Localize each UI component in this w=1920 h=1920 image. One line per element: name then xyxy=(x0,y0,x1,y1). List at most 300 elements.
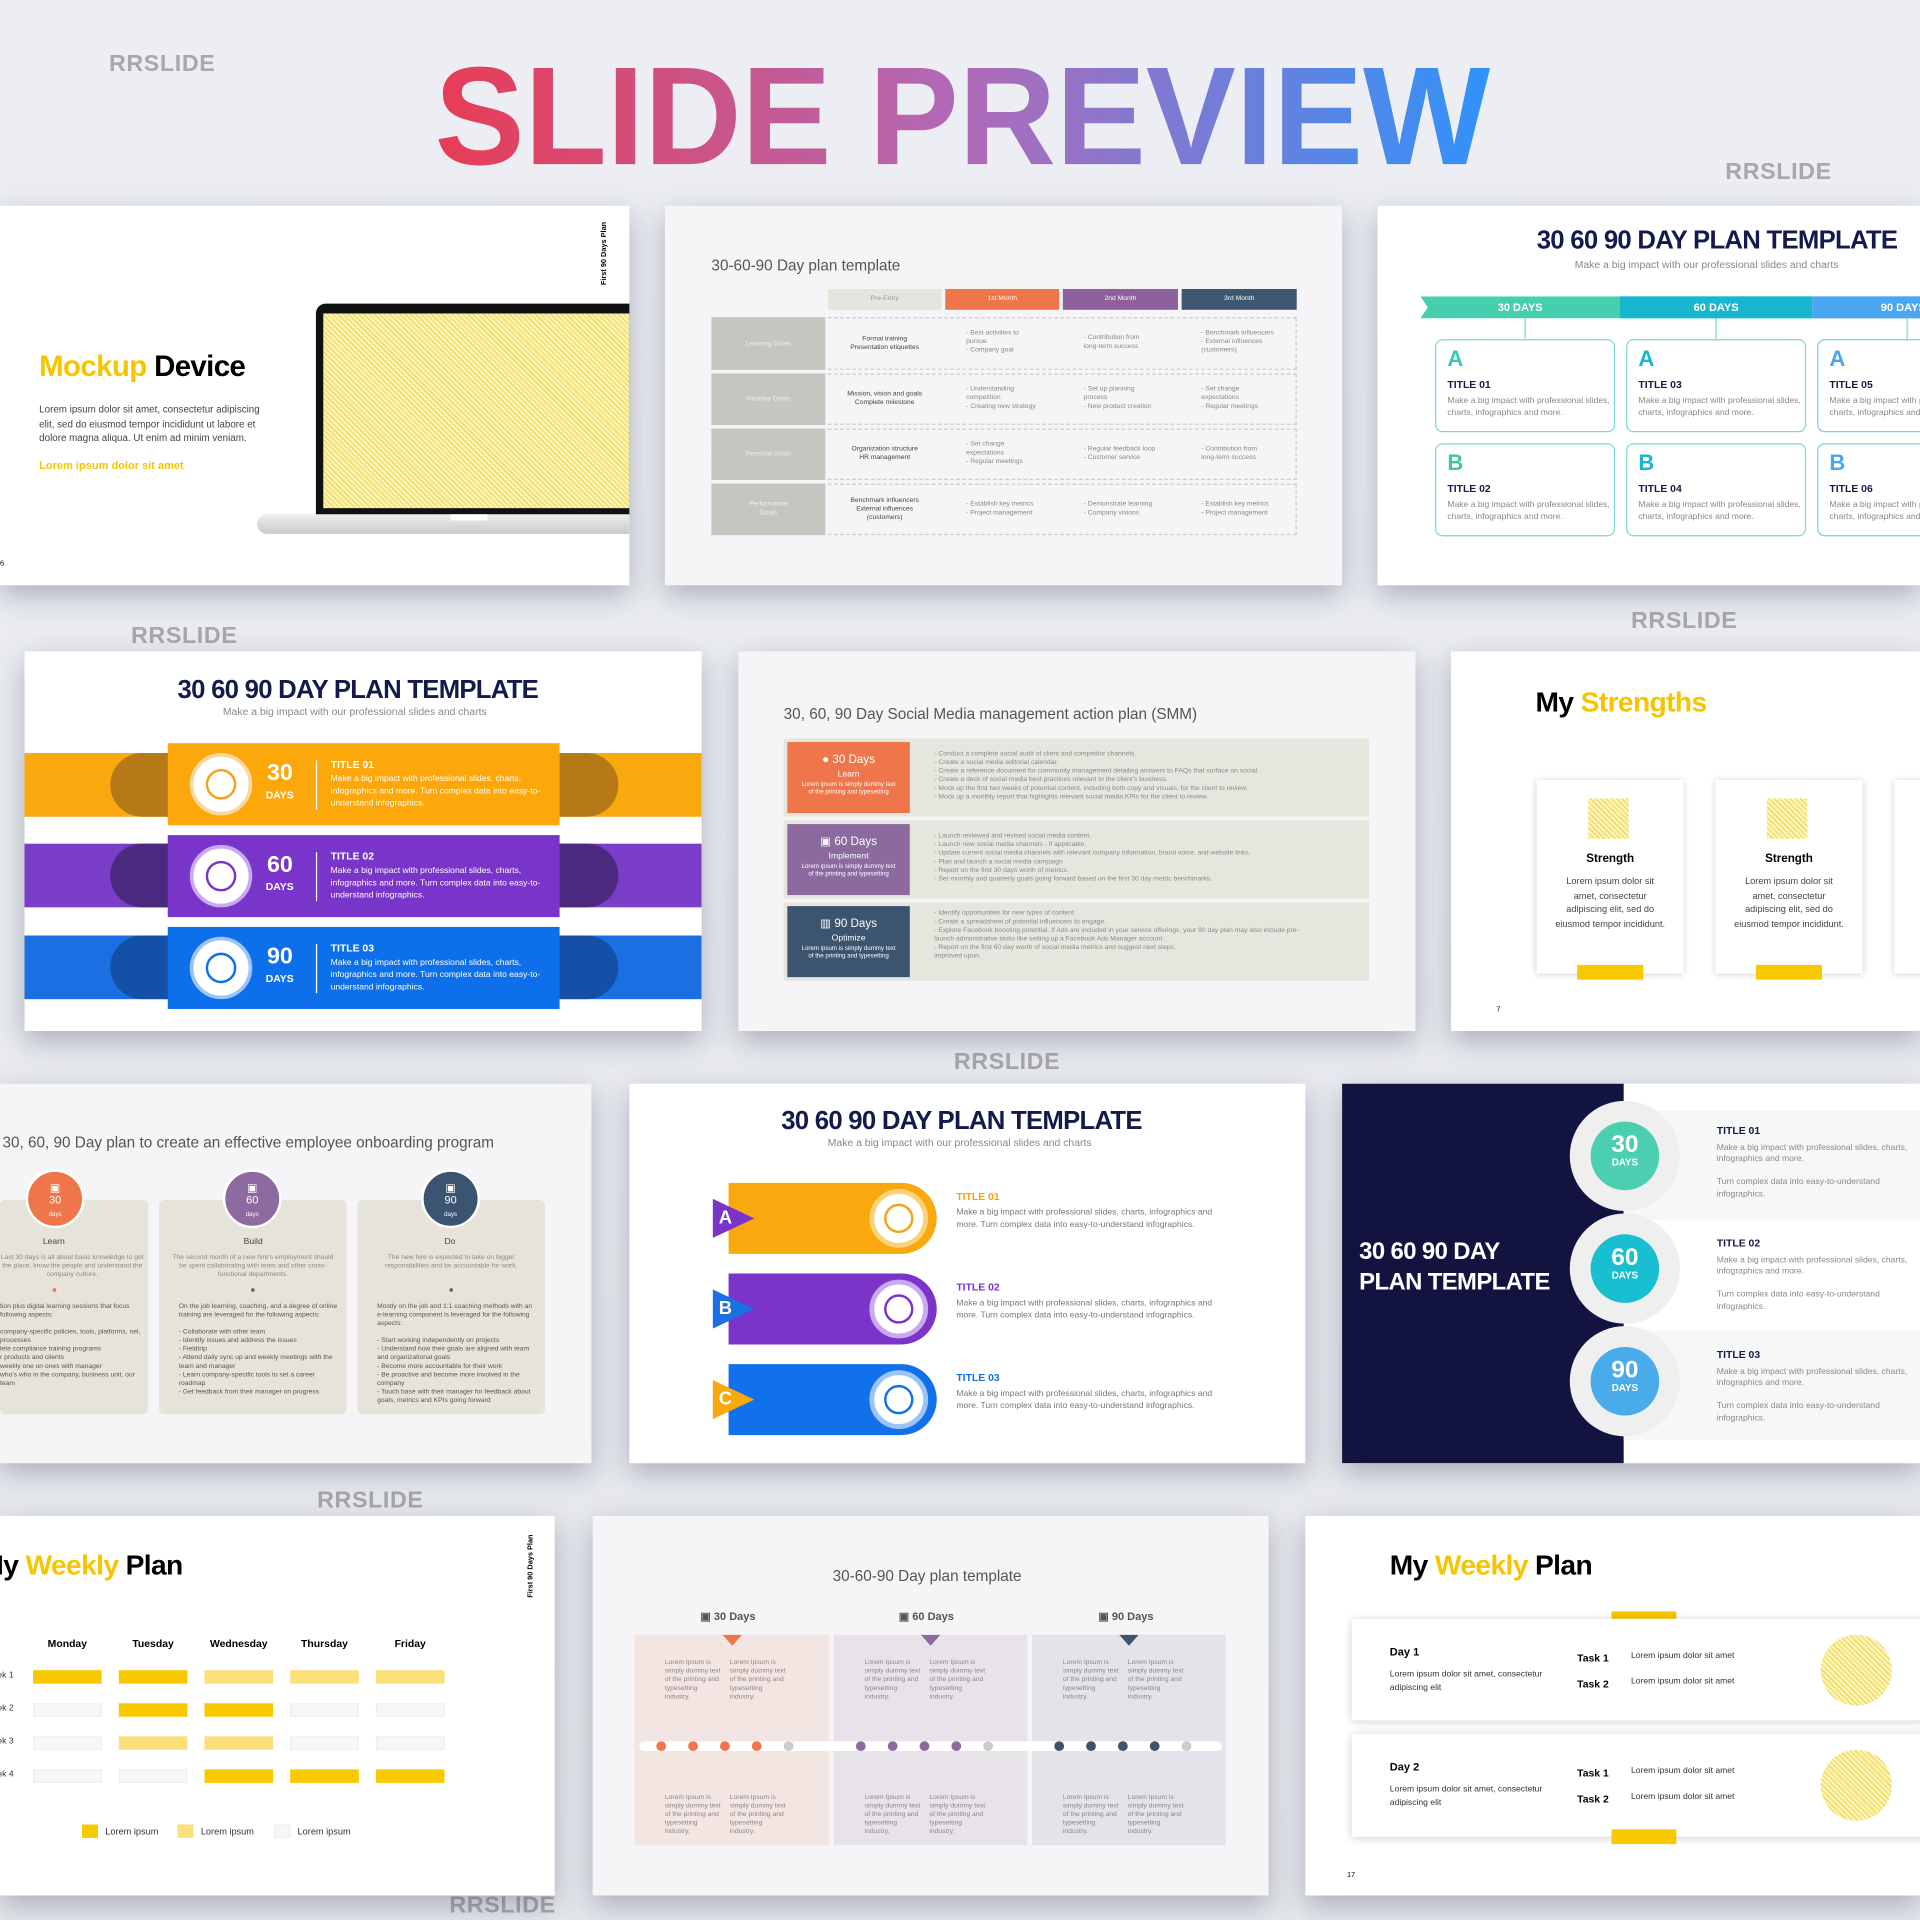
column 30 days: of the printing and xyxy=(730,1676,784,1684)
circle 90: 90 xyxy=(1611,1357,1639,1384)
timeline bar xyxy=(1420,296,1920,318)
band 30 days: TITLE 01 xyxy=(331,758,374,770)
band 30 days: 30 xyxy=(267,760,293,786)
columns: Build xyxy=(244,1238,263,1247)
columns: The second month of a new hire's employment should be spent collaborating with team and other cross-functional departments. xyxy=(172,1254,333,1278)
table rows: pursue xyxy=(966,338,987,345)
column 90 days: Lorem Ipsum is xyxy=(1128,1794,1174,1801)
table rows: Initiative Goals xyxy=(746,396,790,403)
table rows: (customers) xyxy=(867,514,902,522)
row 30 days: - Mock up a monthly report that highlights relevant social media KPIs for the client to review. xyxy=(934,793,1208,801)
row 90 days: launch administrative tasks like setting up a Facebook Ads Manager account. xyxy=(934,936,1164,943)
navy panel xyxy=(1342,1084,1624,1463)
heading: 30-60-90 Day plan template xyxy=(711,257,900,274)
day 2 card: Task 2 xyxy=(1577,1793,1609,1805)
table rows: Organization structure xyxy=(852,446,918,453)
column 30 days: of the printing and xyxy=(665,1811,719,1818)
row 30 days xyxy=(784,738,1369,817)
row 90 days xyxy=(784,902,1369,981)
columns: lete compliance training programs xyxy=(0,1346,101,1353)
columns: - Fieldtrip xyxy=(179,1346,207,1353)
cards grid: TITLE 01 xyxy=(1447,378,1491,391)
circle 60: 60 xyxy=(1611,1244,1639,1271)
cards grid: Make a big impact with professional slides, charts, infographics and more. xyxy=(1638,397,1801,418)
row 90 days: Optimize xyxy=(832,934,865,943)
table header xyxy=(828,289,1297,310)
day headers: Tuesday xyxy=(132,1637,174,1649)
slide H: A B C arrows xyxy=(629,1084,1305,1463)
table rows: Benchmark influencers xyxy=(850,497,919,504)
row 90 days: Lorem ipsum is simply dummy text xyxy=(802,945,896,953)
band 60 days: 60 xyxy=(267,852,293,878)
columns: - Collaborate with other team xyxy=(179,1329,265,1336)
strength cards xyxy=(1533,778,1920,980)
strength cards: Strength xyxy=(1765,852,1813,866)
watermark: RRSLIDE middle: RRSLIDE xyxy=(954,1049,1060,1075)
row 60 days: ▣ 60 Days xyxy=(820,835,877,849)
table rows: - Set change xyxy=(966,441,1004,448)
table rows: Presentation etiquettes xyxy=(850,344,919,351)
day 2 card: Task 1 xyxy=(1577,1767,1609,1779)
table rows: Formal training xyxy=(862,336,907,343)
columns: - Learn company-specific tools to set a career roadmap xyxy=(179,1371,315,1387)
column 30 days xyxy=(634,1635,829,1845)
column 60 days: simply dummy text xyxy=(864,1802,920,1810)
day 1 card: Lorem ipsum dolor sit amet xyxy=(1631,1678,1734,1686)
column 90 days: Lorem Ipsum is xyxy=(1128,1659,1174,1667)
link text: Lorem ipsum dolor sit amet xyxy=(39,459,184,471)
columns: - Be proactive and become more involved in the company xyxy=(377,1371,520,1387)
slide F: My Strengths xyxy=(1451,651,1920,1031)
columns: - Touch base with their manager for feedback about goals, metrics and KPIs going forward xyxy=(377,1389,531,1404)
subtitle: Make a big impact with our professional slides and charts xyxy=(828,1136,1092,1149)
slide I: dark navy template: TITLE 02 xyxy=(1717,1237,1760,1249)
day 2 card: Lorem ipsum dolor sit amet xyxy=(1631,1793,1734,1801)
row 60 days xyxy=(784,820,1369,899)
day 2 card: Lorem ipsum dolor sit amet xyxy=(1631,1767,1734,1776)
slide D: bands 30/60/90 xyxy=(24,651,702,1031)
day 1 card: Lorem ipsum dolor sit amet xyxy=(1631,1652,1734,1660)
strength cards: Lorem ipsum dolor sit amet, consectetur adipiscing elit, sed do eiusmod tempor incididunt. xyxy=(1555,876,1665,929)
row 30 days: - Create a deck of social media best practices relevant to the client's business. xyxy=(934,776,1168,784)
table header: Pre-Entry xyxy=(870,295,899,302)
row 60 days: Lorem ipsum is simply dummy text xyxy=(802,863,896,871)
column 90 days: industry. xyxy=(1128,1693,1153,1701)
column 60 days: Lorem Ipsum is xyxy=(864,1659,911,1667)
column 30 days: typesetting xyxy=(665,1685,697,1692)
column 90 days: industry. xyxy=(1128,1828,1153,1836)
table rows: expectations xyxy=(966,449,1004,457)
band 90 days: DAYS xyxy=(266,972,294,984)
columns: days xyxy=(246,1211,259,1218)
row texts xyxy=(1716,1124,1907,1198)
column 90 days: typesetting xyxy=(1128,1820,1160,1827)
column 90 days: Lorem Ipsum is xyxy=(1063,1794,1109,1801)
watermark: RRSLIDE row2 right: RRSLIDE xyxy=(1631,609,1737,634)
slide I: dark navy template: Turn complex data into easy-to-understand infographics. xyxy=(1717,1291,1880,1311)
circle 90: DAYS xyxy=(1612,1382,1638,1393)
columns: - Attend daily sync up and weekly meetings with the team and manager xyxy=(179,1354,333,1370)
row 90 days: improved upon. xyxy=(934,953,981,960)
cards grid: A xyxy=(1638,347,1654,371)
table rows: competition xyxy=(966,394,1001,402)
columns: ▣ xyxy=(50,1182,60,1194)
step A: Make a big impact with professional slides, charts, infographics and more. Turn complex data into easy-to-understand infographics. xyxy=(956,1209,1212,1229)
column 90 days: typesetting xyxy=(1063,1685,1095,1692)
table rows: - Company visions xyxy=(1084,509,1139,517)
step A: A xyxy=(719,1207,732,1228)
column 90 days xyxy=(1032,1635,1226,1845)
column 90 days: of the printing and xyxy=(1128,1811,1182,1818)
table rows: Performance xyxy=(749,501,788,508)
row texts: Turn complex data into easy-to-understand infographics. xyxy=(1717,1178,1880,1198)
columns: - Understand how their goals are aligned with team and organizational goals xyxy=(377,1346,529,1362)
table rows: - Regular meetings xyxy=(966,458,1023,465)
row 60 days: of the printing and typesetting xyxy=(808,871,889,878)
circle 90 xyxy=(1570,1326,1680,1436)
timeline xyxy=(639,1741,1222,1751)
slide J: Weekly Plan grid xyxy=(0,1516,555,1896)
band 30 days xyxy=(24,743,702,826)
row 90 days: - Create a spreadsheet of potential influencers to engage. xyxy=(934,918,1106,926)
row 60 days: - Launch reviewed and revised social media content. xyxy=(934,833,1091,840)
column 60 days: of the printing and xyxy=(864,1676,918,1684)
column 30 days: simply dummy text xyxy=(730,1668,786,1675)
band 90 days: Make a big impact with professional slides, charts, infographics and more. Turn complex data into easy-to-understand infographics. xyxy=(331,959,540,992)
columns: Learn xyxy=(43,1238,65,1247)
step C: Make a big impact with professional slides, charts, infographics and more. Turn complex data into easy-to-understand infographics. xyxy=(956,1390,1212,1411)
column 30 days: simply dummy text xyxy=(665,1668,721,1675)
column 30 days: simply dummy text xyxy=(730,1802,786,1810)
column 60 days: industry. xyxy=(929,1693,954,1701)
table rows: - Project management xyxy=(966,509,1032,517)
table rows: - Regular feedback loop xyxy=(1084,446,1155,453)
column 30 days: Lorem Ipsum is xyxy=(665,1659,711,1667)
row 90 days: ▥ 90 Days xyxy=(820,917,877,931)
column 60 days: of the printing and xyxy=(929,1811,983,1818)
cards grid xyxy=(1435,339,1920,536)
table rows: - Demonstrate learning xyxy=(1084,501,1152,508)
columns: - Become more accountable for their work xyxy=(377,1363,502,1370)
step B xyxy=(712,1274,1212,1344)
heading: My Strengths xyxy=(1536,686,1707,718)
row 60 days: - Update current social media channels with relevant company information, brand voice, and website links. xyxy=(934,850,1251,857)
columns: Do xyxy=(444,1238,455,1247)
table rows: - Regular meetings xyxy=(1201,403,1258,410)
table rows: expectations xyxy=(1201,394,1239,402)
columns: company-specific policies, tools, platforms, nel, processes xyxy=(0,1329,140,1344)
row texts: Make a big impact with professional slides, charts, infographics and more. xyxy=(1717,1143,1907,1163)
step B: TITLE 02 xyxy=(956,1281,1000,1293)
circle 60 xyxy=(1570,1213,1680,1324)
slide B: 30-60-90 table xyxy=(665,206,1342,585)
column 60 days: simply dummy text xyxy=(864,1668,920,1675)
subtitle: Make a big impact with our professional slides and charts xyxy=(1575,258,1839,271)
slide I: dark navy template: Turn complex data into easy-to-understand infographics. xyxy=(1717,1402,1880,1422)
column 30 days: Lorem Ipsum is xyxy=(730,1794,776,1801)
columns: tion plus digital learning sessions that focus following aspects: xyxy=(0,1303,130,1319)
column 60 days: simply dummy text xyxy=(929,1802,985,1810)
table header: 3rd Month xyxy=(1224,295,1254,302)
row 60 days: - Plan and launch a social media campaign xyxy=(934,858,1063,866)
column 30 days: Lorem Ipsum is xyxy=(730,1659,776,1667)
column 30 days: industry. xyxy=(665,1693,690,1701)
page number: 6 xyxy=(0,561,4,568)
row 30 days: ● 30 Days xyxy=(822,753,875,767)
columns: Last 30 days is all about basic knowledge to get the place, know the people and understand the company culture. xyxy=(1,1254,144,1278)
watermark: RRSLIDE top left: RRSLIDE xyxy=(109,51,215,77)
column 60 days: Lorem Ipsum is xyxy=(929,1794,975,1801)
column 30 days: of the printing and xyxy=(665,1676,719,1684)
cards grid: B xyxy=(1447,451,1463,475)
circle 30: DAYS xyxy=(1612,1157,1638,1168)
column 90 days: simply dummy text xyxy=(1128,1802,1184,1810)
heading: 30-60-90 Day plan template xyxy=(833,1567,1022,1584)
columns: On the job learning, coaching, and a degree of online training are leveraged for the following aspects: xyxy=(179,1303,337,1319)
page number: 17 xyxy=(1347,1872,1355,1880)
table rows: - New product creation xyxy=(1084,403,1151,410)
step C: TITLE 03 xyxy=(956,1371,1000,1384)
slide I: dark navy template: Make a big impact with professional slides, charts, infographics and more. xyxy=(1717,1367,1907,1387)
circle 30: 30 xyxy=(1611,1131,1639,1158)
column 90 days: of the printing and xyxy=(1128,1676,1182,1684)
band 90 days: 90 xyxy=(267,944,293,970)
legend: Lorem ipsum xyxy=(105,1826,158,1837)
column 60 days: typesetting xyxy=(864,1685,897,1692)
watermark: RRSLIDE bottom: RRSLIDE xyxy=(449,1893,556,1919)
columns: weekly one on ones with manager xyxy=(0,1363,102,1370)
day headers: Monday xyxy=(48,1637,87,1649)
column 30 days: typesetting xyxy=(665,1820,697,1827)
cards grid: B xyxy=(1638,451,1654,475)
day headers: Wednesday xyxy=(210,1637,268,1649)
row 90 days: of the printing and typesetting xyxy=(808,953,889,960)
table rows: - Understanding xyxy=(966,386,1014,393)
columns: 90 xyxy=(444,1194,457,1206)
day 1 card: Lorem ipsum dolor sit amet, consectetur adipiscing elit xyxy=(1390,1670,1542,1692)
column 60 days: Lorem Ipsum is xyxy=(864,1794,911,1801)
row texts: TITLE 01 xyxy=(1717,1124,1760,1136)
table rows: Personal Goals xyxy=(745,451,791,458)
slide I: dark navy template: TITLE 03 xyxy=(1717,1348,1760,1360)
columns xyxy=(0,1170,545,1414)
day 1 card xyxy=(1348,1611,1920,1726)
heading: 30, 60, 90 Day plan to create an effective employee onboarding program xyxy=(2,1134,494,1151)
row 30 days: Lorem ipsum is simply dummy text xyxy=(802,781,896,789)
column 60 days: of the printing and xyxy=(929,1676,983,1684)
vertical label: First 90 Days Plan xyxy=(601,222,608,285)
table rows: - Establish key metrics xyxy=(1201,501,1269,508)
row 30 days: - Create a social media editorial calendar. xyxy=(934,759,1058,767)
table rows: Goals xyxy=(760,509,777,517)
row 90 days: - Explore Facebook boosting potential. If Ads are included in your service offerings, your 90 day plan may also include pre- xyxy=(934,927,1299,934)
slide I: dark navy template: Make a big impact with professional slides, charts, infographics and more. xyxy=(1717,1256,1907,1276)
day 2 card: Lorem ipsum dolor sit amet, consectetur adipiscing elit xyxy=(1390,1785,1542,1807)
watermark: RRSLIDE top right: RRSLIDE xyxy=(1725,159,1832,185)
band 60 days: DAYS xyxy=(266,880,294,893)
column 90 days: of the printing and xyxy=(1063,1676,1117,1684)
table rows: External influences xyxy=(856,506,913,513)
text block: Lorem ipsum dolor sit amet, consectetur adipiscing elit, sed do eiusmod tempor incididunt ut labore et dolore magna aliqua. Ut enim ad minim veniam. xyxy=(39,404,260,443)
day headers: Friday xyxy=(395,1637,426,1649)
row 60 days: - Launch new social media channels - if applicable. xyxy=(934,841,1086,849)
strength cards: Strength xyxy=(1586,852,1634,866)
table rows: HR management xyxy=(859,454,910,462)
column 90 days: Lorem Ipsum is xyxy=(1063,1659,1109,1667)
columns: ▣ xyxy=(247,1182,257,1194)
table header: 2nd Month xyxy=(1104,295,1136,302)
timeline bar: 30 DAYS xyxy=(1498,301,1543,313)
cards grid: TITLE 05 xyxy=(1829,378,1873,391)
column 30 days: typesetting xyxy=(730,1820,762,1827)
day 1 card: Task 2 xyxy=(1577,1678,1609,1690)
table rows: - Creating new strategy xyxy=(966,403,1036,410)
slide G: onboarding program xyxy=(0,1084,591,1463)
columns: Mostly on the job and 1:1 coaching methods with an e-learning component is leveraged for the following aspects: xyxy=(377,1303,532,1327)
day 2 card: Day 2 xyxy=(1390,1761,1419,1773)
column 60 days: industry. xyxy=(864,1693,889,1701)
row 30 days: of the printing and typesetting xyxy=(808,789,889,796)
column 60 days: typesetting xyxy=(929,1820,962,1827)
column headers: ▣ 30 Days xyxy=(700,1610,756,1622)
column 90 days: typesetting xyxy=(1128,1685,1160,1692)
step C xyxy=(712,1364,1212,1436)
table rows: - Company goal xyxy=(966,347,1014,354)
column 30 days: typesetting xyxy=(730,1685,762,1692)
row 30 days: Learn xyxy=(838,770,860,779)
row 60 days: - Report on the first 30 days worth of metrics. xyxy=(934,867,1069,874)
day 2 card xyxy=(1348,1731,1920,1844)
cards grid: Make a big impact with professional slides, charts, infographics and more. xyxy=(1447,501,1610,522)
band 60 days: Make a big impact with professional slides, charts, infographics and more. Turn complex data into easy-to-understand infographics. xyxy=(331,867,540,900)
subtitle: Make a big impact with our professional slides and charts xyxy=(223,705,487,718)
column 60 days xyxy=(834,1635,1027,1845)
column 60 days: simply dummy text xyxy=(929,1668,985,1675)
columns: The new hire is expected to take on bigger responsibilities and be accountable for work. xyxy=(385,1254,517,1270)
table header: 1st Month xyxy=(987,295,1017,302)
step A xyxy=(712,1182,1212,1254)
band 90 days: TITLE 03 xyxy=(331,942,374,954)
heading xyxy=(1359,1238,1550,1296)
cards grid: TITLE 02 xyxy=(1447,482,1491,495)
week grid xyxy=(0,1670,444,1783)
legend xyxy=(82,1824,351,1838)
cards grid: A xyxy=(1447,347,1463,371)
table rows: long-term success xyxy=(1201,454,1256,462)
cards grid: Make a big impact with professional slides, charts, infographics and more. xyxy=(1638,501,1801,522)
row 30 days: - Conduct a complete social audit of client and competitor channels. xyxy=(934,751,1136,758)
column 30 days: of the printing and xyxy=(730,1811,784,1818)
column 90 days: typesetting xyxy=(1063,1820,1095,1827)
column 30 days: industry. xyxy=(730,1828,755,1836)
vertical label: First 90 Days Plan xyxy=(528,1534,535,1598)
column 60 days: industry. xyxy=(929,1828,954,1836)
slide A: Mockup Device xyxy=(0,206,629,585)
heading: 30, 60, 90 Day Social Media management action plan (SMM) xyxy=(784,705,1197,722)
band 60 days xyxy=(24,835,702,918)
slide I: dark navy template xyxy=(1342,1084,1920,1463)
column 60 days: industry. xyxy=(864,1828,889,1836)
cards grid: TITLE 04 xyxy=(1638,482,1682,495)
column 30 days: industry. xyxy=(730,1693,755,1701)
legend: Lorem ipsum xyxy=(201,1826,254,1837)
watermark: RRSLIDE row4: RRSLIDE xyxy=(317,1488,424,1513)
column 90 days: simply dummy text xyxy=(1063,1802,1119,1810)
band 60 days: TITLE 02 xyxy=(331,850,374,862)
day 1 card: Day 1 xyxy=(1390,1646,1419,1658)
column 90 days: simply dummy text xyxy=(1063,1668,1119,1675)
heading: Mockup Device: Mockup Device xyxy=(39,350,245,383)
columns: days xyxy=(444,1211,457,1218)
columns: 30 xyxy=(49,1194,61,1206)
columns: who's who in the company, business unit, our team xyxy=(0,1371,135,1387)
heading: 30 60 90 DAY PLAN TEMPLATE xyxy=(178,676,538,704)
column 30 days: simply dummy text xyxy=(665,1802,721,1810)
circle 30 xyxy=(1570,1101,1680,1211)
column 90 days: industry. xyxy=(1063,1828,1088,1836)
heading: 30 60 90 DAY PLAN TEMPLATE xyxy=(781,1107,1142,1135)
column 60 days: of the printing and xyxy=(864,1811,918,1818)
day headers xyxy=(48,1637,426,1649)
day 1 card: Task 1 xyxy=(1577,1652,1609,1664)
row backgrounds xyxy=(1624,1111,1920,1220)
cards grid: TITLE 03 xyxy=(1638,378,1682,391)
table rows: Mission, vision and goals xyxy=(847,391,922,398)
row 90 days: - Report on the first 60 day worth of social media metrics and suggest next steps. xyxy=(934,944,1176,951)
table rows: - Project management xyxy=(1201,509,1267,517)
timeline bar: 60 DAYS xyxy=(1694,301,1739,313)
column 60 days: Lorem Ipsum is xyxy=(929,1659,975,1667)
step B: B xyxy=(719,1298,732,1319)
cards grid: TITLE 06 xyxy=(1829,482,1873,495)
column 60 days: typesetting xyxy=(864,1820,897,1827)
table rows: Learning Goals xyxy=(746,340,791,348)
columns: ▣ xyxy=(445,1182,456,1194)
heading: 30 60 90 DAY PLAN TEMPLATE xyxy=(1537,227,1897,255)
slide C: 30 60 90 cards xyxy=(1378,206,1920,585)
columns: - Get feedback from their manager on progress xyxy=(179,1389,319,1396)
column 30 days: Lorem Ipsum is xyxy=(665,1794,711,1801)
watermark: RRSLIDE row2 left: RRSLIDE xyxy=(131,623,237,649)
column 60 days: typesetting xyxy=(929,1685,962,1692)
table rows: - Contribution from xyxy=(1201,446,1257,453)
page number: 7 xyxy=(1496,1007,1500,1014)
heading: 30 60 90 DAY xyxy=(1359,1238,1500,1265)
slide K: timeline columns xyxy=(593,1516,1269,1896)
table rows: - Customer service xyxy=(1084,454,1140,462)
slide L: My Weekly Plan days xyxy=(1305,1516,1920,1896)
table rows: - Set change xyxy=(1201,386,1239,393)
table rows: - External influences xyxy=(1201,338,1262,345)
table rows: - Benchmark influencers xyxy=(1201,329,1274,337)
heading: My Weekly Plan xyxy=(1390,1549,1592,1581)
row 30 days: - Mock up the first two weeks of potential content, including both copy and visuals, for the client to review. xyxy=(934,785,1248,792)
table rows: Complete milestone xyxy=(855,399,914,407)
slide K: timeline columns: ▣ 60 Days xyxy=(899,1610,954,1622)
column 90 days: industry. xyxy=(1063,1693,1088,1701)
table rows: process xyxy=(1084,394,1107,402)
column 90 days: of the printing and xyxy=(1063,1811,1117,1818)
column 90 days: simply dummy text xyxy=(1128,1668,1184,1675)
columns: r products and clients xyxy=(0,1354,64,1362)
step C: C xyxy=(719,1389,732,1409)
table rows xyxy=(711,317,1297,536)
table rows: - Best activities to xyxy=(966,329,1019,337)
columns: 60 xyxy=(246,1194,258,1206)
legend: Lorem ipsum xyxy=(298,1826,351,1837)
circle 60: DAYS xyxy=(1612,1270,1638,1281)
columns: - Identify issues and address the issues xyxy=(179,1337,297,1344)
